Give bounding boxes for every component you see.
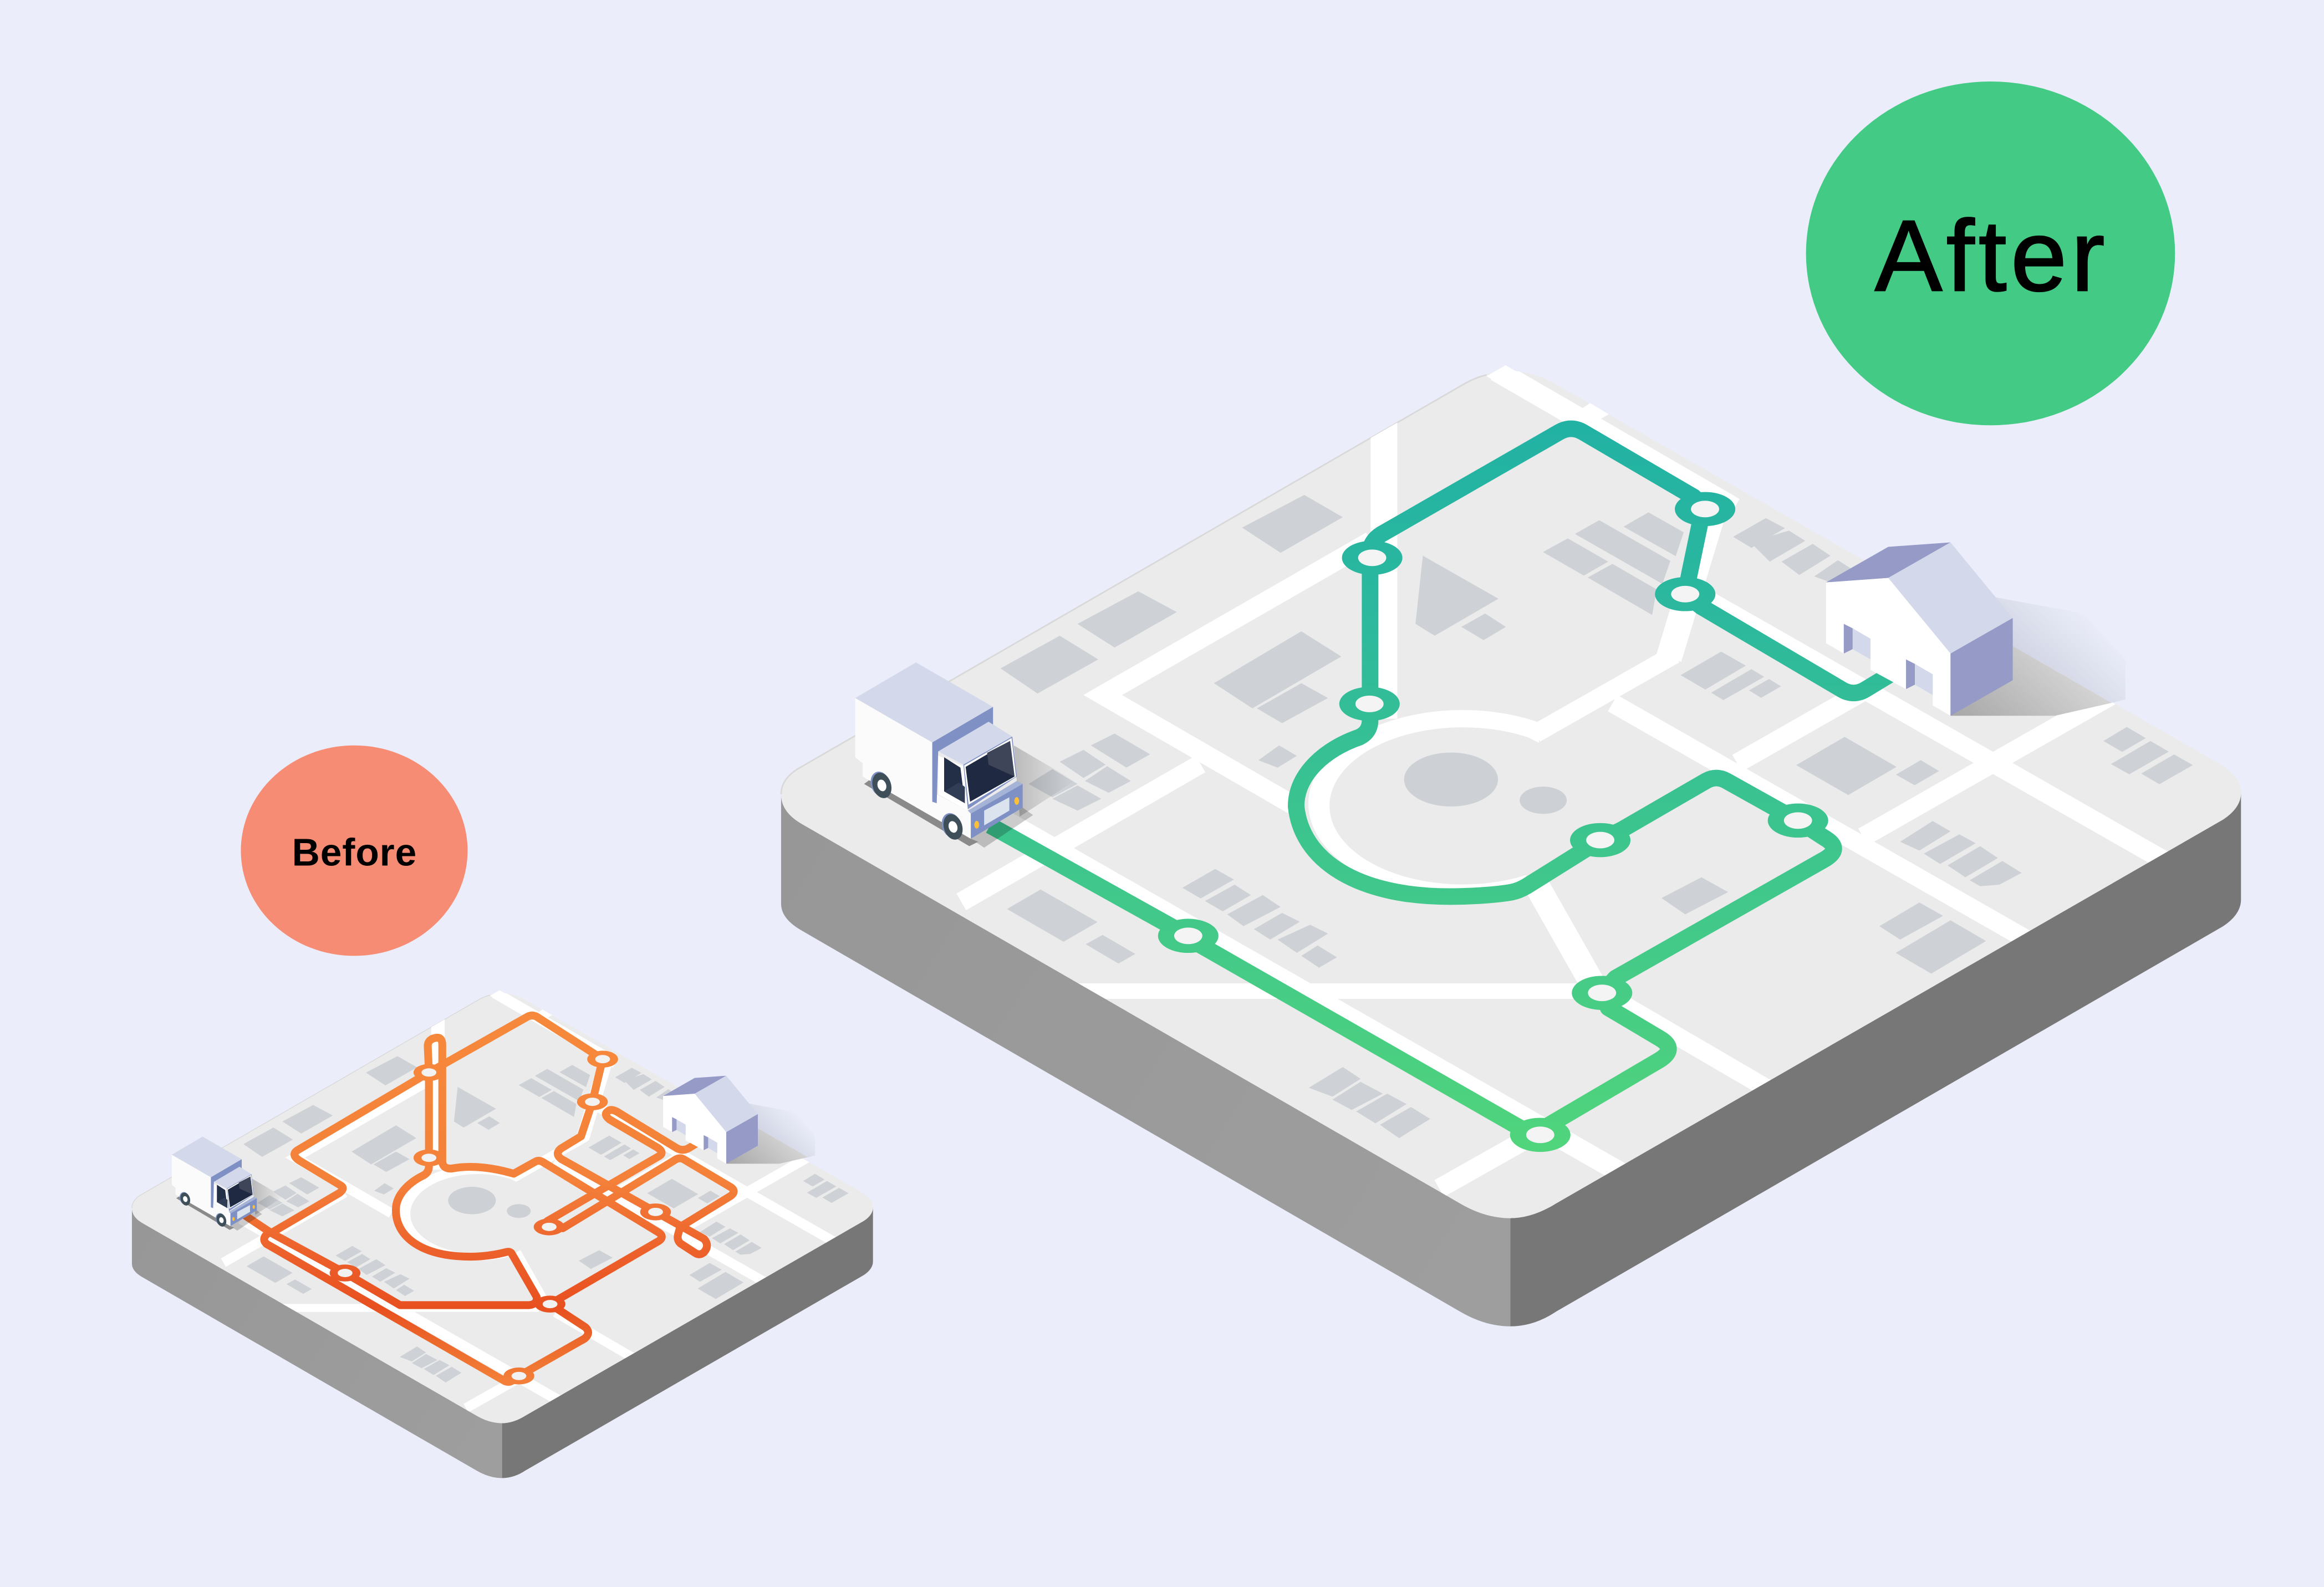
badge: After [1806, 81, 2175, 425]
orange route stops [330, 1050, 671, 1385]
platform left face [781, 794, 1510, 1326]
badge: Before: Before [292, 830, 416, 874]
icon: destination house [1826, 542, 2126, 716]
before map base [132, 990, 873, 1478]
platform right face [1510, 793, 2241, 1326]
tangled orange route [244, 1016, 734, 1382]
road tip and side spur [1486, 365, 1609, 420]
green route stops [1158, 492, 1828, 1152]
icon: delivery truck [855, 662, 1074, 848]
icon: small delivery truck [172, 1137, 283, 1231]
badge: After: After [1875, 199, 2104, 312]
roundabout ring [1308, 710, 1539, 897]
optimised green route [990, 428, 1891, 1136]
buildings [1001, 495, 2193, 1138]
roundabout ponds [1404, 753, 1567, 814]
badge: Before [241, 746, 467, 956]
after map [781, 365, 2241, 1326]
icon: small destination house [663, 1076, 815, 1164]
roads [961, 370, 2194, 1188]
before map [132, 990, 873, 1478]
map base: platform, roads and buildings [781, 365, 2241, 1326]
platform top surface [781, 371, 2241, 1218]
